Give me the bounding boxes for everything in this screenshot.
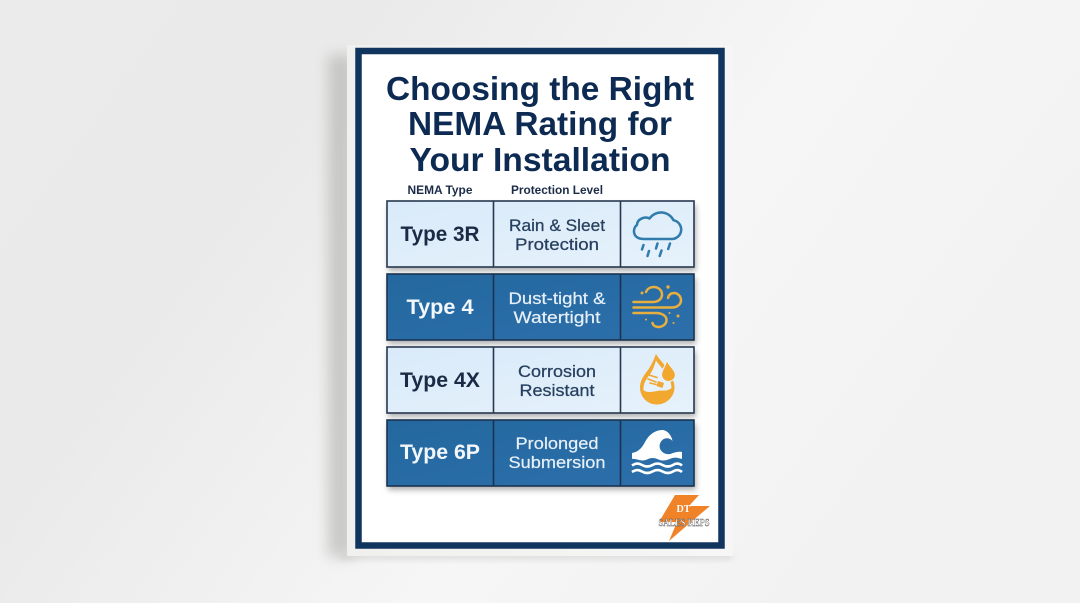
column headers: Protection Level — [511, 185, 603, 197]
row: Type 3R: Type 3R — [400, 223, 480, 246]
row: Type 6P — [387, 420, 694, 486]
logo: DT Sales Reps — [658, 495, 710, 541]
row shadows — [388, 205, 696, 490]
logo: DT Sales Reps: DT — [676, 503, 691, 515]
row: Type 3R: Rain & Sleet — [509, 217, 605, 235]
row: Type 6P: Prolonged — [516, 435, 598, 453]
row: Type 4X: Resistant — [520, 382, 595, 400]
title: Choosing the Right — [386, 70, 694, 107]
row: Type 4X: Type 4X — [400, 369, 480, 392]
panel: poster — [347, 45, 733, 556]
row: Type 4 — [387, 274, 694, 340]
title: Your Installation — [410, 141, 670, 178]
logo: DT Sales Reps: SALES REPS — [658, 518, 710, 529]
poster shadow — [328, 55, 732, 560]
icon: corrosion drop — [640, 354, 676, 404]
row: Type 3R — [387, 201, 694, 267]
row: Type 4: Dust-tight & — [508, 290, 606, 308]
icon: wave — [632, 430, 682, 473]
row: Type 4X: Corrosion — [518, 363, 596, 381]
row: Type 4: Type 4 — [406, 296, 474, 319]
row: Type 4: Watertight — [514, 309, 601, 327]
column headers — [408, 185, 603, 197]
row: Type 4X — [387, 347, 694, 413]
icon: wind and dust — [634, 285, 681, 327]
title — [386, 70, 694, 178]
row: Type 6P: Type 6P — [400, 441, 480, 464]
row: Type 3R: Protection — [515, 236, 599, 254]
column headers: NEMA Type — [408, 185, 472, 197]
row: Type 6P: Submersion — [508, 454, 606, 472]
icon: rain cloud — [634, 212, 681, 256]
title: NEMA Rating for — [408, 105, 672, 142]
